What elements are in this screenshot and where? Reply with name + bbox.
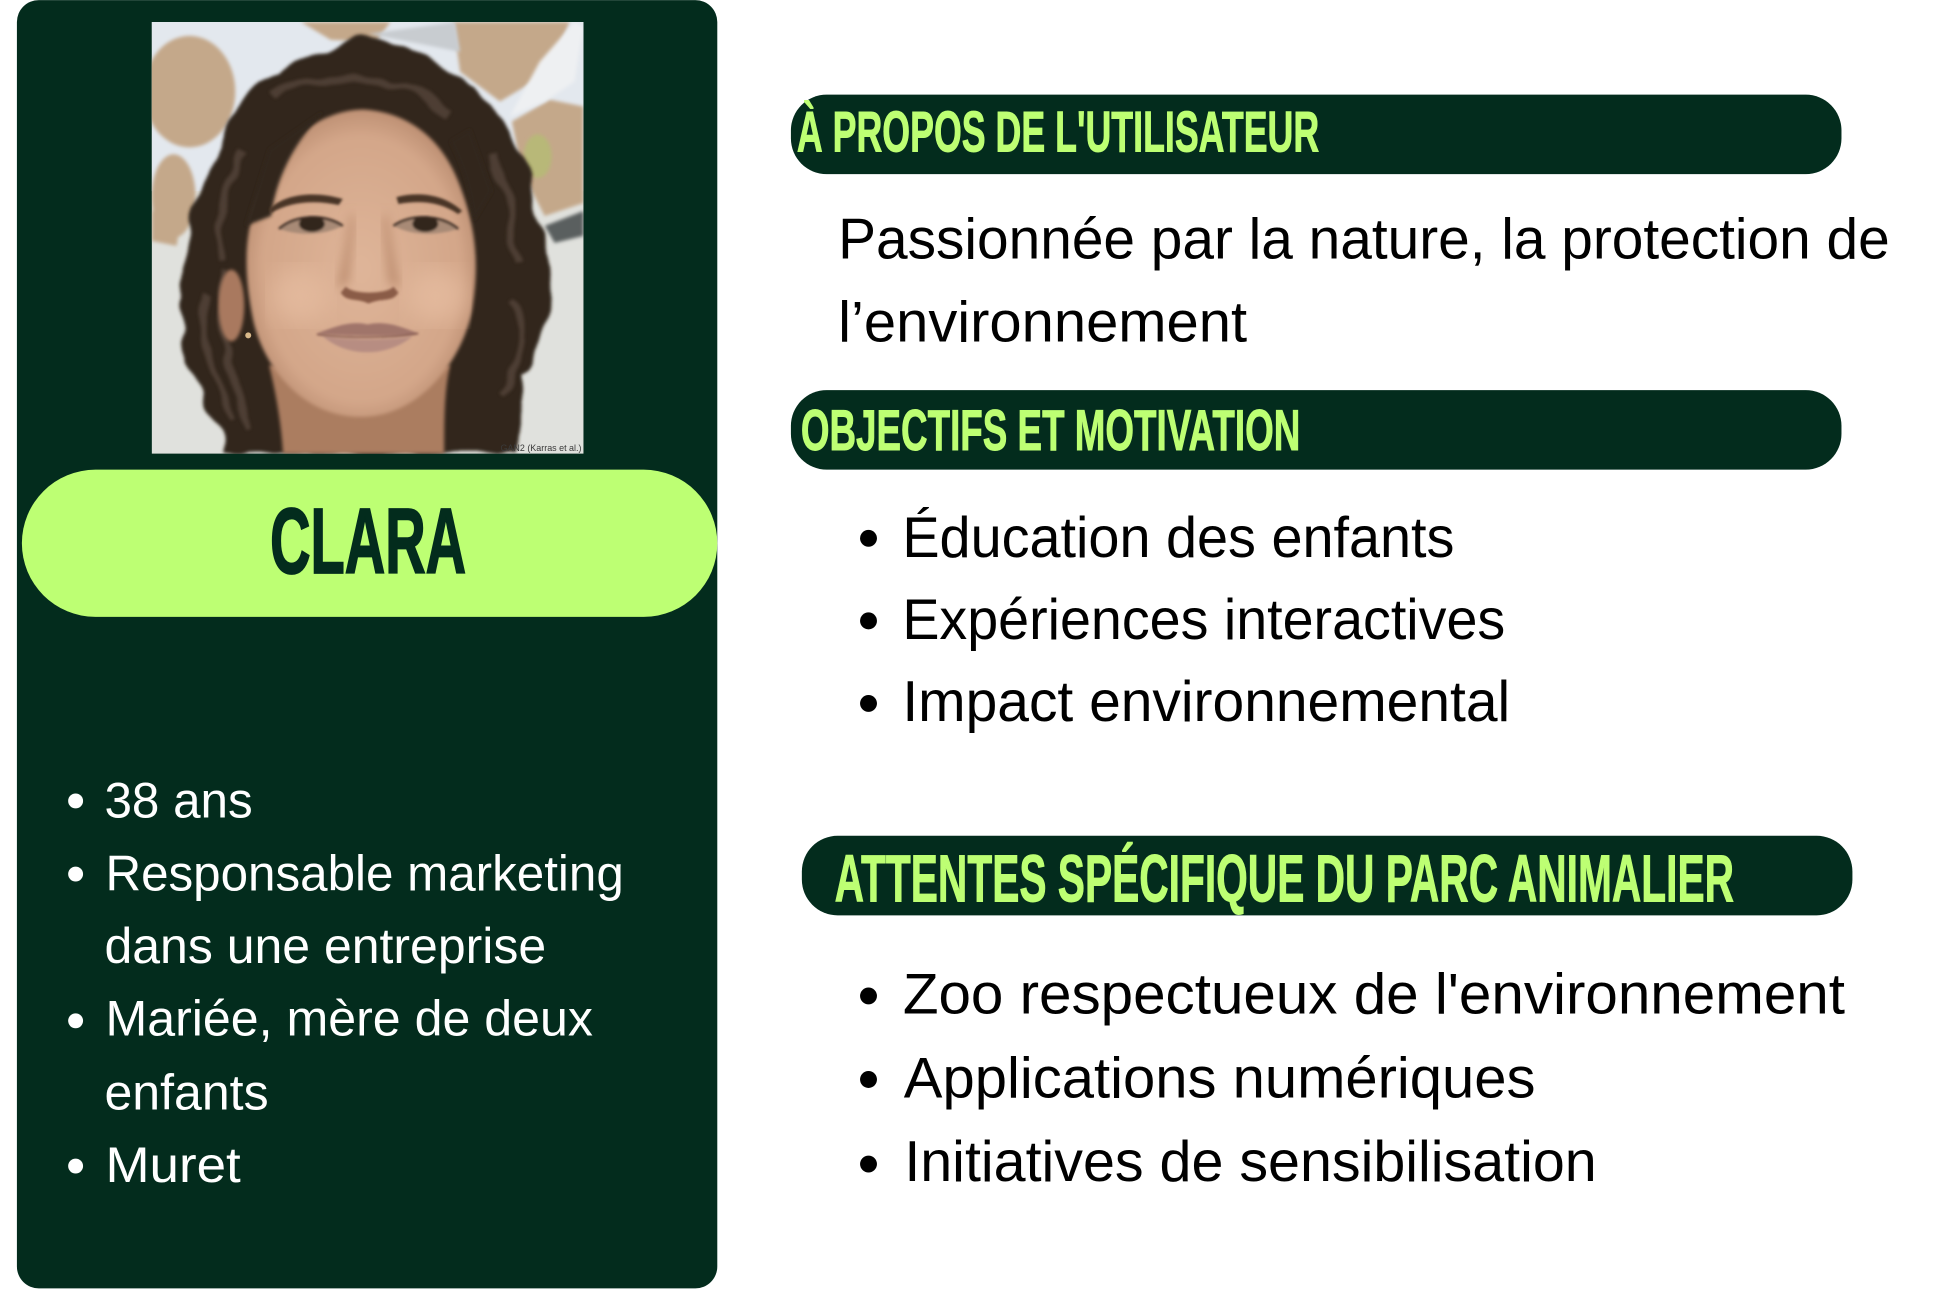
watermark: GAN2 (Karras et al.) — [501, 443, 582, 453]
heading: goals and motivation — [791, 390, 1841, 470]
name pill: CLARA — [270, 489, 466, 593]
list: goals — [860, 506, 1510, 734]
list: expectations — [860, 962, 1845, 1194]
panel: profile — [17, 0, 717, 1288]
list: expectations: Applications numériques — [904, 1046, 1536, 1110]
hairline strands over forehead — [248, 121, 318, 226]
eyes — [279, 216, 458, 234]
heading: about the user — [791, 95, 1841, 174]
list: goals: Impact environnemental — [902, 670, 1510, 734]
list: personal details: Mariée, mère de deux — [105, 991, 593, 1047]
ear — [218, 270, 244, 341]
list: personal details: dans une entreprise — [104, 918, 546, 974]
list: personal details: 38 ans — [104, 772, 253, 828]
text block: about: l’environnement — [838, 290, 1247, 354]
neck — [269, 365, 450, 454]
list: goals: Éducation des enfants — [902, 506, 1454, 570]
name pill — [22, 470, 717, 617]
mouth — [317, 323, 418, 352]
heading: goals and motivation: OBJECTIFS ET MOTIVATION — [801, 399, 1300, 463]
list: personal details — [68, 772, 624, 1193]
list: expectations: Initiatives de sensibilisation — [904, 1130, 1597, 1194]
heading: about the user: À PROPOS DE L'UTILISATEUR — [797, 100, 1319, 164]
list: goals: Expériences interactives — [902, 588, 1505, 652]
face — [247, 110, 476, 417]
photo: portrait of Clara — [144, 22, 583, 454]
list: personal details: Muret — [105, 1137, 241, 1193]
eyebrows — [269, 195, 343, 213]
list: expectations: Zoo respectueux de l'environnement — [903, 962, 1845, 1026]
hair — [182, 40, 551, 454]
list: personal details: enfants — [104, 1064, 269, 1120]
text block: about: Passionnée par la nature, la protection de — [838, 208, 1890, 272]
cheek and nose shading — [273, 274, 318, 319]
text block: about — [838, 208, 1890, 354]
list: personal details: Responsable marketing — [105, 845, 624, 901]
